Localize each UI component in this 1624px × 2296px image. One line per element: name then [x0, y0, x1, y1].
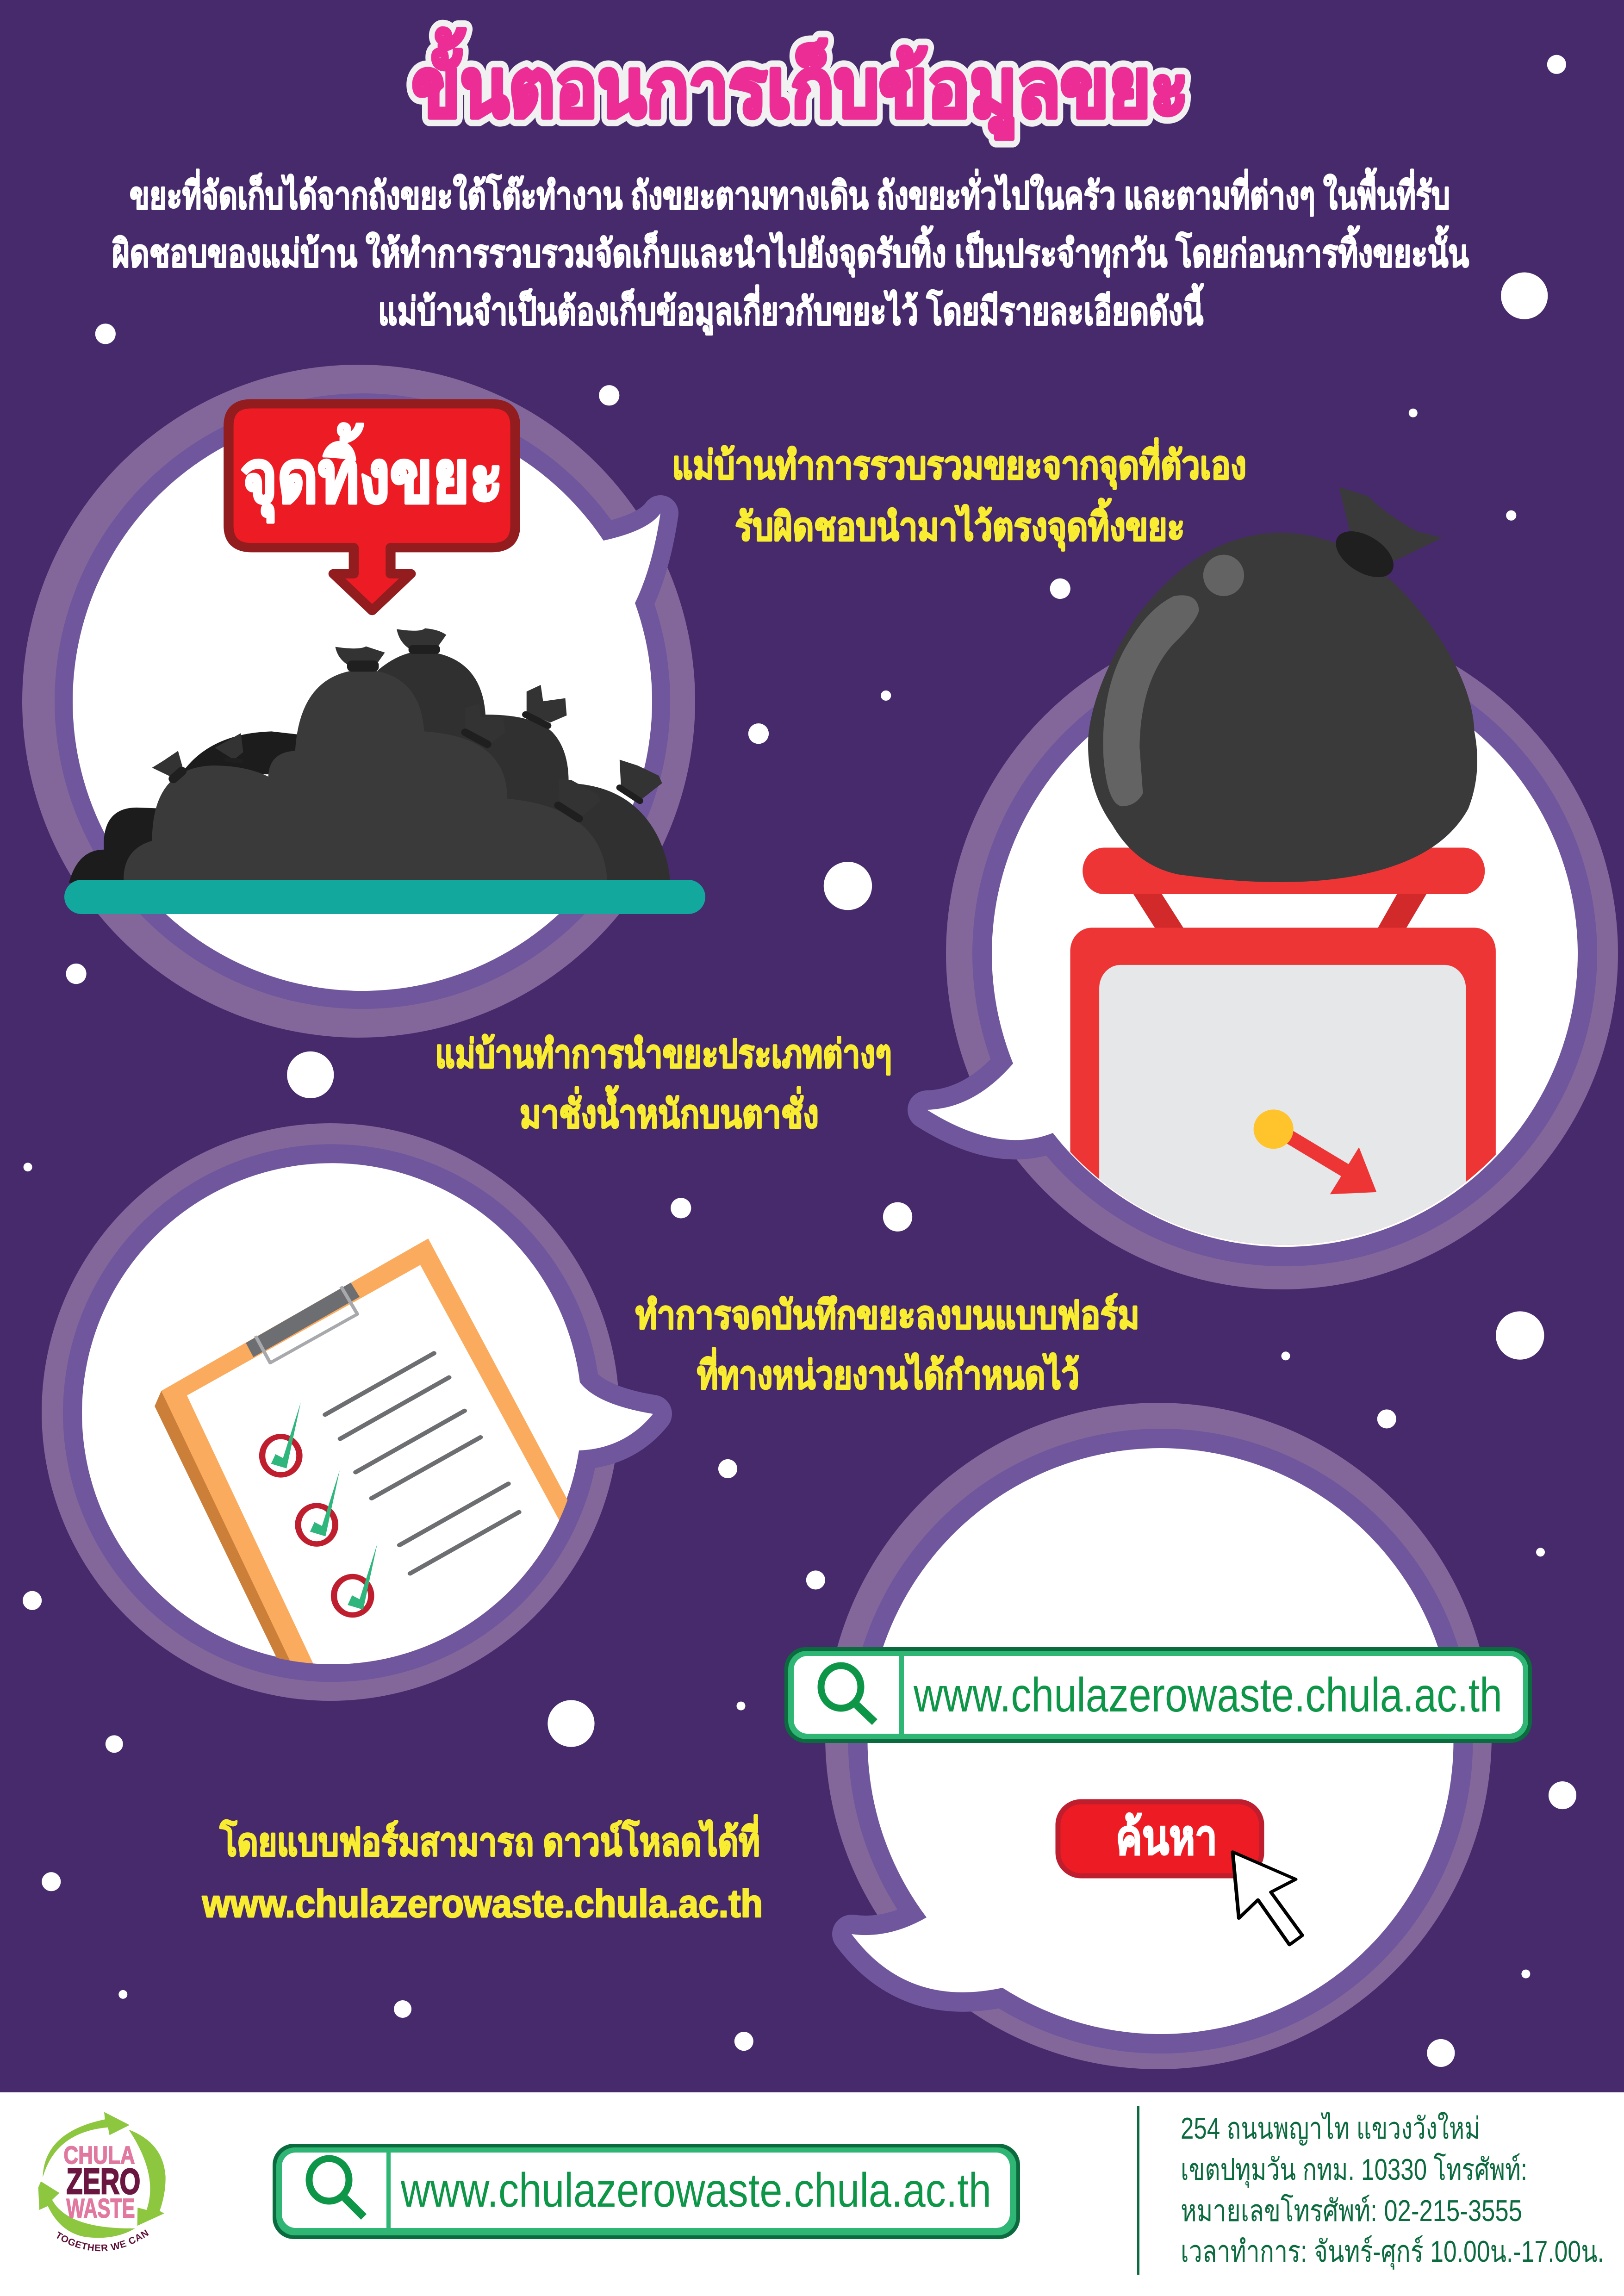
- footer search bar: www.chulazerowaste.chula.ac.th: [400, 2164, 991, 2217]
- intro paragraph: แม่บ้านจำเป็นต้องเก็บข้อมูลเกี่ยวกับขยะไว้ โดยมีรายละเอียดดังนี้: [378, 283, 1204, 335]
- step 2 caption: [435, 1032, 892, 1136]
- step 3 caption: [635, 1293, 1139, 1397]
- logo: Chula Zero Waste: ZERO: [66, 2161, 140, 2202]
- teal ground bar: [64, 880, 705, 914]
- panel: step 3 form bubble: [42, 1123, 653, 1717]
- bubble 4 speech shape: [852, 1448, 1454, 2034]
- search bar: [784, 1647, 1532, 1743]
- logo: Chula Zero Waste: TOGETHER WE CAN: [54, 2228, 151, 2253]
- bubble 2 speech shape: [927, 661, 1578, 1247]
- clipboard: [155, 1238, 567, 1664]
- panel: step 2 weighing bubble: [927, 487, 1618, 1341]
- panel: step 1 collection point bubble: [22, 365, 705, 1038]
- step 4 caption: โดยแบบฟอร์มสามารถ ดาวน์โหลดได้ที่: [219, 1815, 760, 1864]
- bubble 3 speech shape: [82, 1163, 653, 1663]
- contact details: หมายเลขโทรศัพท์: 02-215-3555: [1181, 2194, 1522, 2228]
- bubble 4 ring: [825, 1403, 1492, 2069]
- title: ขั้นตอนการเก็บข้อมูลขยะ: [412, 28, 1188, 139]
- logo: Chula Zero Waste: CHULA: [63, 2142, 135, 2169]
- red sign with arrow: [229, 404, 515, 610]
- step 3 caption: ทำการจดบันทึกขยะลงบนแบบฟอร์ม: [635, 1293, 1139, 1337]
- contact details: [1181, 2111, 1604, 2270]
- bubble 1 ring: [22, 365, 695, 1038]
- garbage bag pile: [69, 628, 670, 883]
- title: ขั้นตอนการเก็บข้อมูลขยะ: [412, 28, 1188, 139]
- logo: Chula Zero Waste: WASTE: [66, 2194, 135, 2224]
- bubble 2 ring: [946, 617, 1618, 1289]
- contact details: 254 ถนนพญาไท แขวงวังใหม่: [1181, 2111, 1480, 2146]
- red sign with arrow: จุดทิ้งขยะ: [241, 423, 503, 523]
- footer divider: [1137, 2106, 1139, 2275]
- contact details: เขตปทุมวัน กทม. 10330 โทรศัพท์:: [1181, 2153, 1527, 2188]
- logo: Chula Zero Waste: [38, 2112, 166, 2253]
- step 2 caption: แม่บ้านทำการนำขยะประเภทต่างๆ: [435, 1032, 892, 1076]
- step 2 caption: มาชั่งน้ำหนักบนตาชั่ง: [520, 1085, 819, 1136]
- step 4 caption: www.chulazerowaste.chula.ac.th: [202, 1882, 763, 1925]
- search button: ค้นหา: [1116, 1811, 1217, 1865]
- icon: mouse cursor: [1232, 1852, 1302, 1945]
- footer search bar: [273, 2144, 1020, 2239]
- step 1 caption: แม่บ้านทำการรวบรวมขยะจากจุดที่ตัวเอง: [672, 438, 1246, 490]
- bubble 3 ring: [42, 1123, 619, 1701]
- big garbage bag: [1088, 487, 1477, 882]
- footer band: [0, 2092, 1624, 2296]
- step 1 caption: รับผิดชอบนำมาไว้ตรงจุดทิ้งขยะ: [735, 498, 1185, 551]
- step 1 caption: [672, 438, 1246, 551]
- search bar: www.chulazerowaste.chula.ac.th: [913, 1668, 1502, 1722]
- search button: [1058, 1802, 1262, 1876]
- bubble 1 speech shape: [73, 411, 660, 991]
- panel: step 4 download bubble: [784, 1403, 1532, 2069]
- step 3 caption: ที่ทางหน่วยงานได้กำหนดไว้: [697, 1348, 1079, 1397]
- step 4 caption: [202, 1815, 763, 1925]
- weighing scale: [1070, 848, 1496, 1245]
- intro paragraph: [112, 168, 1469, 335]
